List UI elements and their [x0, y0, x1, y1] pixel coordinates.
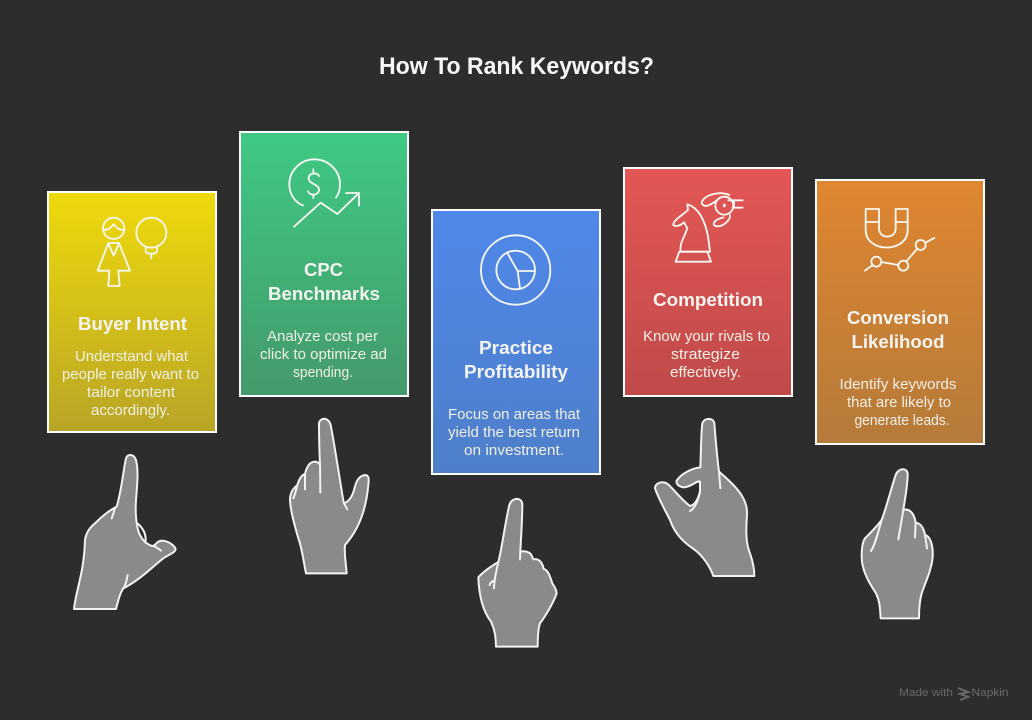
text: conversion likelihood description: that are likely to	[847, 395, 951, 411]
text: practice profitability description	[448, 407, 580, 459]
footer: made with napkin: Napkin	[972, 687, 1008, 699]
icon: magnet and line chart	[865, 209, 934, 271]
text: buyer intent description: tailor content	[87, 385, 175, 401]
text: buyer intent description	[62, 349, 199, 419]
text: cpc benchmarks description: Analyze cost per	[267, 329, 378, 345]
heading: cpc benchmarks: Benchmarks	[268, 283, 380, 304]
panel: conversion likelihood	[816, 180, 984, 444]
heading: practice profitability: Profitability	[464, 361, 569, 382]
text: cpc benchmarks description: spending.	[293, 365, 353, 381]
icon: person and lightbulb	[98, 218, 166, 286]
heading: buyer intent: Buyer Intent	[78, 313, 187, 334]
text: competition description: effectively.	[670, 365, 741, 381]
icon: hand pointing at cpc benchmarks	[290, 419, 369, 573]
heading: cpc benchmarks	[268, 259, 380, 304]
footer: made with napkin	[899, 687, 1008, 700]
text: practice profitability description: on investment.	[464, 443, 564, 459]
text: cpc benchmarks description	[260, 329, 387, 381]
text: buyer intent description: people really want to	[62, 367, 199, 383]
text: conversion likelihood description	[840, 377, 956, 429]
icon: hand pointing at buyer intent	[74, 455, 176, 609]
heading: competition: Competition	[653, 289, 763, 310]
heading: conversion likelihood: Likelihood	[852, 331, 944, 352]
panel: competition	[624, 168, 792, 396]
text: buyer intent description: Understand what	[75, 349, 188, 365]
icon: chess knight and target	[673, 193, 743, 262]
heading: practice profitability	[464, 337, 569, 382]
heading: practice profitability: Practice	[479, 337, 553, 358]
icon: hand pointing at practice profitability	[478, 499, 557, 647]
icon: hand pointing at competition	[655, 419, 754, 576]
footer: made with napkin: Made with	[899, 687, 953, 699]
panel: buyer intent	[48, 192, 216, 432]
text: conversion likelihood description: generate leads.	[854, 413, 950, 429]
text: practice profitability description: Focus on areas that	[448, 407, 580, 423]
text: competition description	[643, 329, 770, 381]
title: How To Rank Keywords?	[379, 53, 654, 80]
heading: conversion likelihood	[847, 307, 949, 352]
text: competition description: Know your rivals to	[643, 329, 770, 345]
icon: dollar coin and rising arrow	[289, 159, 359, 227]
text: buyer intent description: accordingly.	[91, 403, 170, 419]
text: cpc benchmarks description: click to optimize ad	[260, 347, 387, 363]
text: competition description: strategize	[671, 347, 740, 363]
text: conversion likelihood description: Identify keywords	[840, 377, 956, 393]
icon: pie chart in ring	[481, 235, 550, 305]
heading: conversion likelihood: Conversion	[847, 307, 949, 328]
panel: cpc benchmarks	[240, 132, 408, 396]
panel: practice profitability	[432, 210, 600, 474]
icon: hand pointing at conversion likelihood	[862, 469, 933, 618]
text: practice profitability description: yield the best return	[448, 425, 580, 441]
heading: cpc benchmarks: CPC	[304, 259, 343, 280]
